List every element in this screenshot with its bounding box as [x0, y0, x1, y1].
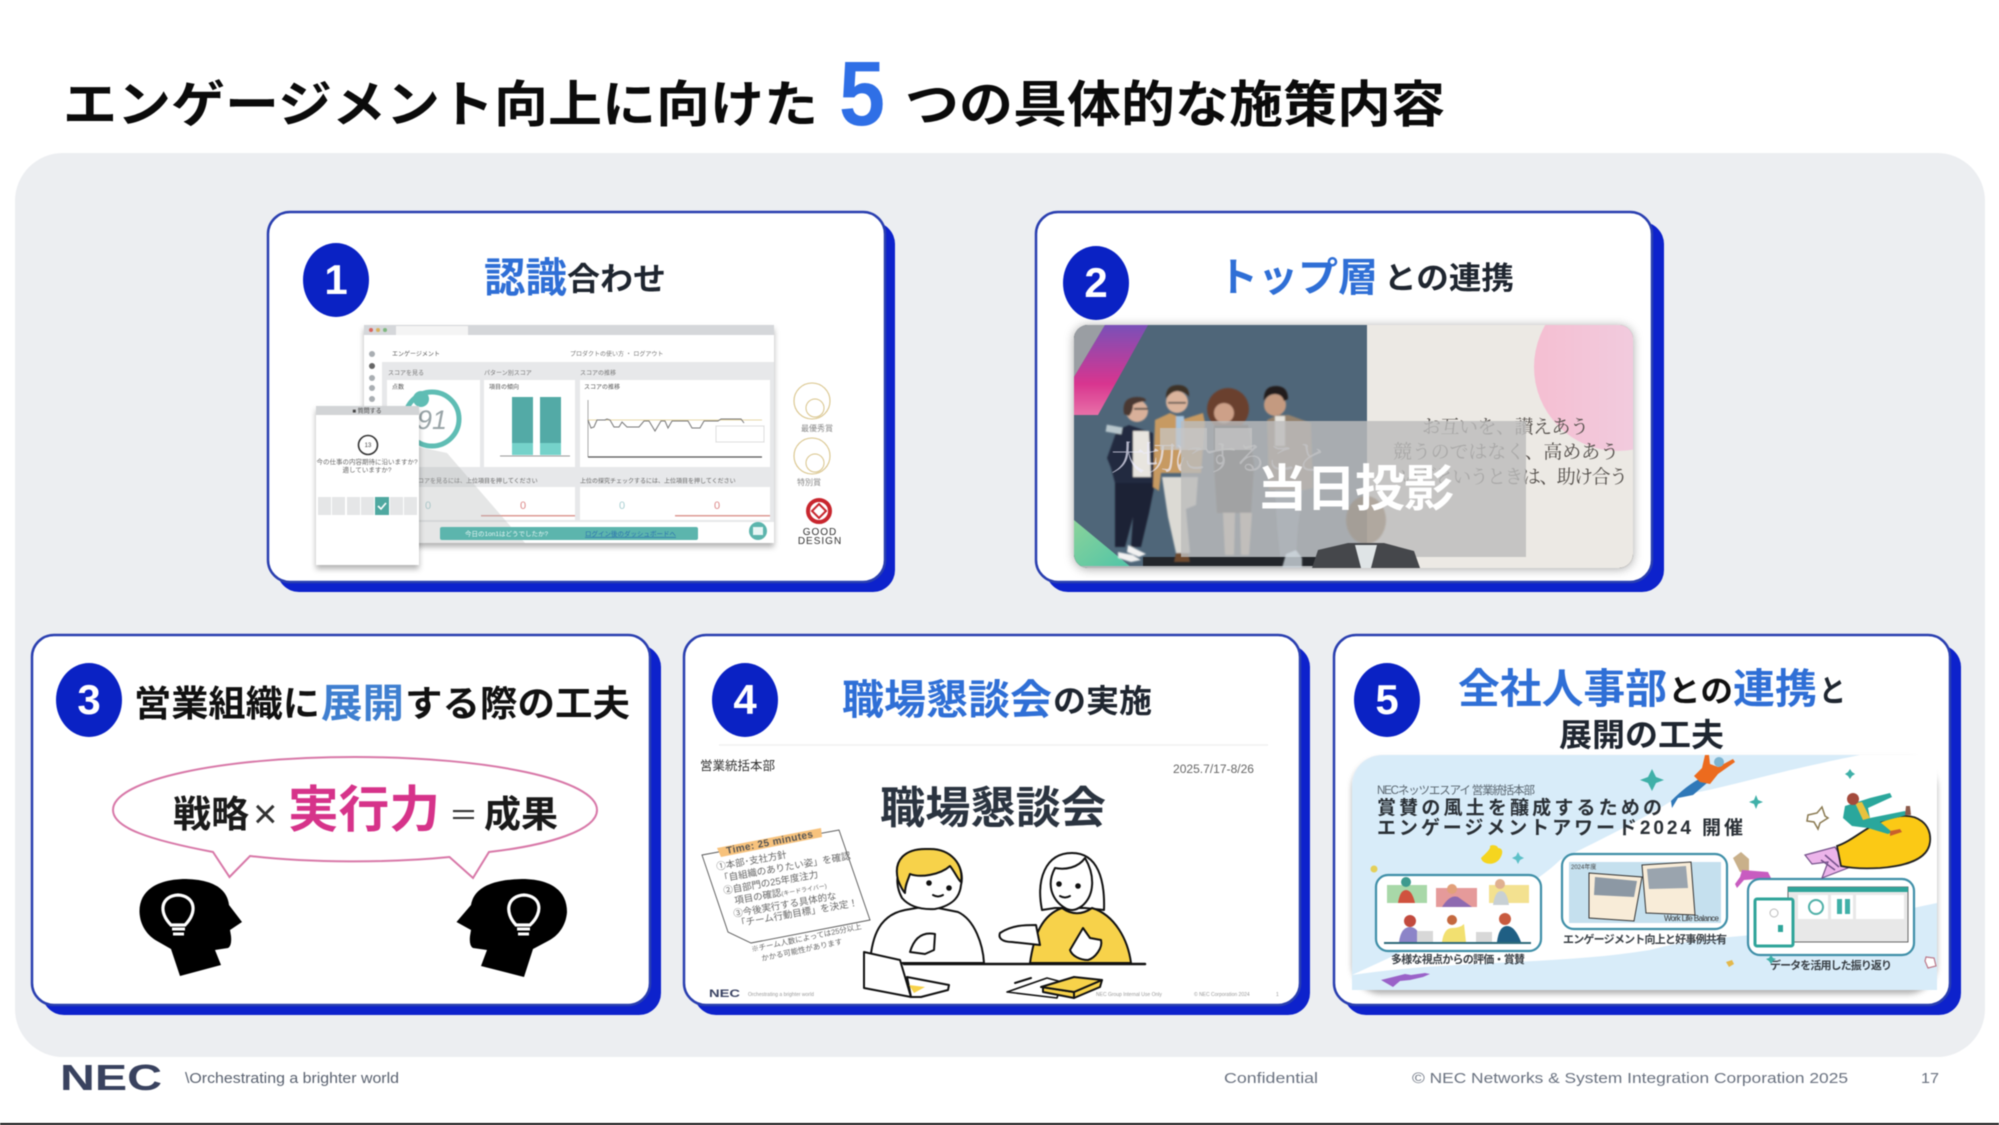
panel: card 1 認識合わせ — [268, 212, 895, 592]
award marks: 特別賞 — [797, 477, 821, 487]
note paper: 項目の確認(キードライバー) — [733, 879, 828, 907]
heading 3: 営業組織に — [134, 683, 320, 724]
box: case sharing: Work Life Balance — [1664, 914, 1720, 923]
donut score 91 — [405, 391, 459, 446]
heading 5: と — [1819, 674, 1846, 709]
speech bubble: ＝ — [449, 800, 478, 833]
slide header: 2025.7/17-8/26 — [1173, 764, 1254, 776]
speech bubble: 成果 — [484, 794, 558, 835]
page number: 17 — [1921, 1070, 1939, 1087]
title: 5 — [839, 43, 885, 145]
note paper: かかる可能性があります — [760, 936, 843, 963]
dashboard screenshot: スコアを見るには、上位項目を押してください — [412, 477, 538, 485]
award poster: 多様な視点からの評価・賞賛 — [1391, 952, 1525, 966]
box: data review — [1748, 879, 1914, 955]
title: エンゲージメント向上に向けた — [63, 77, 818, 133]
award poster: データを活用した振り返り — [1770, 958, 1892, 972]
dashboard screenshot — [364, 325, 774, 543]
dashboard screenshot: エンゲージメント — [392, 350, 440, 358]
speech bubble: 戦略 — [173, 794, 249, 835]
slide footer: © NEC Corporation 2024 — [1194, 991, 1250, 998]
poster heading: 賞賛の風土を醸成するための — [1377, 796, 1662, 819]
award poster: エンゲージメント向上と好事例共有 — [1563, 932, 1727, 946]
poster heading — [1377, 783, 1743, 839]
phone screenshot: 13 — [365, 443, 372, 449]
slide footer: 1 — [1276, 992, 1279, 998]
heading 2 — [1218, 256, 1514, 300]
book and papers — [1007, 977, 1102, 998]
tagline: \Orchestrating a brighter world — [185, 1070, 399, 1087]
icon: flying person — [1671, 755, 1735, 808]
award marks: DESIGN — [798, 536, 842, 547]
note paper: ※チーム人数によっては25分以上 — [750, 921, 863, 954]
people group — [1106, 385, 1313, 562]
phone screenshot: 今の仕事の内容期待に沿いますか? — [316, 457, 418, 466]
bar chart — [500, 397, 570, 456]
dashboard screenshot: 点数 — [392, 383, 404, 391]
panel: card 5 全社人事部との連携と展開の工夫 — [1334, 635, 1961, 1015]
dashboard screenshot: 0 — [520, 500, 526, 512]
panel: card 3 営業組織に展開する際の工夫 — [32, 635, 661, 1015]
phone screenshot: 適していますか? — [343, 465, 392, 474]
label 当日投影: 当日投影 — [1257, 461, 1454, 517]
video still: お互いを、讃えあう — [1422, 416, 1589, 438]
note paper: ②自部門の25年度注力 — [722, 868, 819, 897]
copyright: © NEC Networks & System Integration Corporation 2025 — [1412, 1070, 1848, 1087]
note paper: Time: 25 minutes — [725, 829, 814, 857]
note paper: ①本部･支社方針 — [715, 849, 788, 873]
heading 5: との — [1668, 674, 1733, 709]
slide header: 営業統括本部 — [700, 758, 775, 773]
slide footer: NEC — [709, 988, 740, 1000]
award marks — [794, 383, 842, 547]
note paper: 「チーム行動目標」を決定！ — [735, 897, 859, 930]
video still — [1068, 320, 1640, 576]
heading 1: 認識 — [484, 255, 567, 301]
logo NEC: NEC — [60, 1057, 162, 1098]
icon: head with lightbulb left — [139, 879, 242, 976]
note paper: ③今後実行する具体的な — [732, 890, 837, 920]
title: つの具体的な施策内容 — [905, 77, 1445, 133]
slide footer: NEC Group Internal Use Only — [1096, 992, 1162, 998]
box: case sharing: 2024年度 — [1571, 863, 1596, 871]
dashboard screenshot: プロダクトの使い方 ・ ログアウト — [570, 350, 663, 358]
title — [63, 43, 1445, 145]
phone screenshot: ■ 質問する — [352, 407, 382, 415]
video still: いざというときは、助け合う — [1400, 466, 1628, 488]
donut score 91: 91 — [417, 405, 447, 435]
icon: head with lightbulb right — [456, 879, 567, 977]
dashboard screenshot: スコアの推移 — [584, 383, 620, 391]
heading 1: 合わせ — [567, 261, 666, 297]
dashboard screenshot: 上位の探究チェックするには、上位項目を押してください — [580, 477, 736, 485]
dashboard screenshot: パターン別スコア — [484, 369, 532, 377]
badge 1 — [303, 243, 369, 317]
award poster — [1352, 755, 1937, 990]
heading 3: 展開 — [321, 682, 404, 726]
badge 5: 5 — [1375, 676, 1399, 723]
video still: 競うのではなく、高めあう — [1393, 441, 1619, 463]
heading 2: トップ層 — [1218, 256, 1378, 300]
heading 3 — [134, 682, 630, 726]
slide footer — [709, 988, 1279, 1000]
dashboard screenshot: 0 — [714, 500, 720, 512]
heading 3: する際の工夫 — [405, 683, 630, 724]
heading 1 — [484, 255, 666, 301]
heading 5: 全社人事部 — [1458, 666, 1667, 712]
speech bubble — [113, 757, 597, 878]
badge 1: 1 — [324, 256, 348, 303]
heading 5 — [1458, 666, 1846, 753]
heading 2: との連携 — [1384, 261, 1514, 296]
dashboard screenshot: スコアを見る — [388, 370, 424, 377]
dashboard screenshot: ログイン後のダッシュボードへ — [585, 529, 676, 538]
icon: sparkles and small figures — [1370, 769, 1936, 987]
slide title: 職場懇談会 — [880, 784, 1106, 833]
badge 4: 4 — [733, 676, 757, 723]
badge 2: 2 — [1084, 259, 1108, 306]
heading 5: 連携 — [1733, 666, 1817, 712]
note paper — [702, 828, 870, 963]
heading 4: の実施 — [1053, 683, 1152, 719]
badge 4 — [712, 663, 778, 737]
illustration: two people talking — [864, 849, 1145, 998]
confidential: Confidential — [1224, 1070, 1318, 1087]
dashboard screenshot: 項目の傾向 — [489, 383, 519, 391]
heading 5: 展開の工夫 — [1559, 717, 1724, 753]
footer — [60, 1057, 1939, 1098]
poster heading: NECネッツエスアイ 営業統括本部 — [1377, 783, 1536, 797]
panel: card 4 職場懇談会の実施 — [684, 635, 1310, 1015]
icon: small runner behind boxes — [1733, 852, 1771, 888]
box: case sharing — [1562, 854, 1727, 929]
presenter overlay — [1160, 421, 1526, 568]
panel: grey background — [15, 153, 1985, 1057]
laptop — [864, 952, 949, 997]
speech bubble: 実行力 — [288, 782, 440, 838]
phone screenshot — [316, 406, 419, 565]
panel: card 2 トップ層との連携 — [1036, 212, 1702, 592]
icon: rocket lightbulb with rider — [1805, 793, 1930, 878]
dashboard screenshot: 0 — [425, 500, 431, 512]
heading 4: 職場懇談会 — [842, 677, 1052, 723]
dashboard screenshot: 今日の1on1はどうでしたか? — [465, 529, 548, 538]
badge 3 — [56, 663, 122, 737]
award marks: 最優秀賞 — [801, 423, 833, 433]
speech bubble: × — [253, 790, 278, 837]
badge 3: 3 — [77, 676, 101, 723]
poster heading: エンゲージメントアワード2024 開催 — [1377, 817, 1743, 839]
line chart — [588, 400, 764, 457]
slide footer: Orchestrating a brighter world — [748, 992, 814, 998]
badge 5 — [1354, 663, 1420, 737]
dashboard screenshot: 0 — [619, 500, 625, 512]
slide header — [700, 758, 1254, 776]
heading 4 — [842, 677, 1152, 723]
box: people evaluation — [1376, 875, 1541, 951]
video still: 大切にすること — [1111, 440, 1329, 478]
note paper: 「自組織のありたい姿」を確認 — [718, 850, 852, 885]
badge 2 — [1063, 246, 1129, 320]
award marks: GOOD — [803, 527, 837, 538]
dashboard screenshot: スコアの推移 — [580, 369, 616, 377]
